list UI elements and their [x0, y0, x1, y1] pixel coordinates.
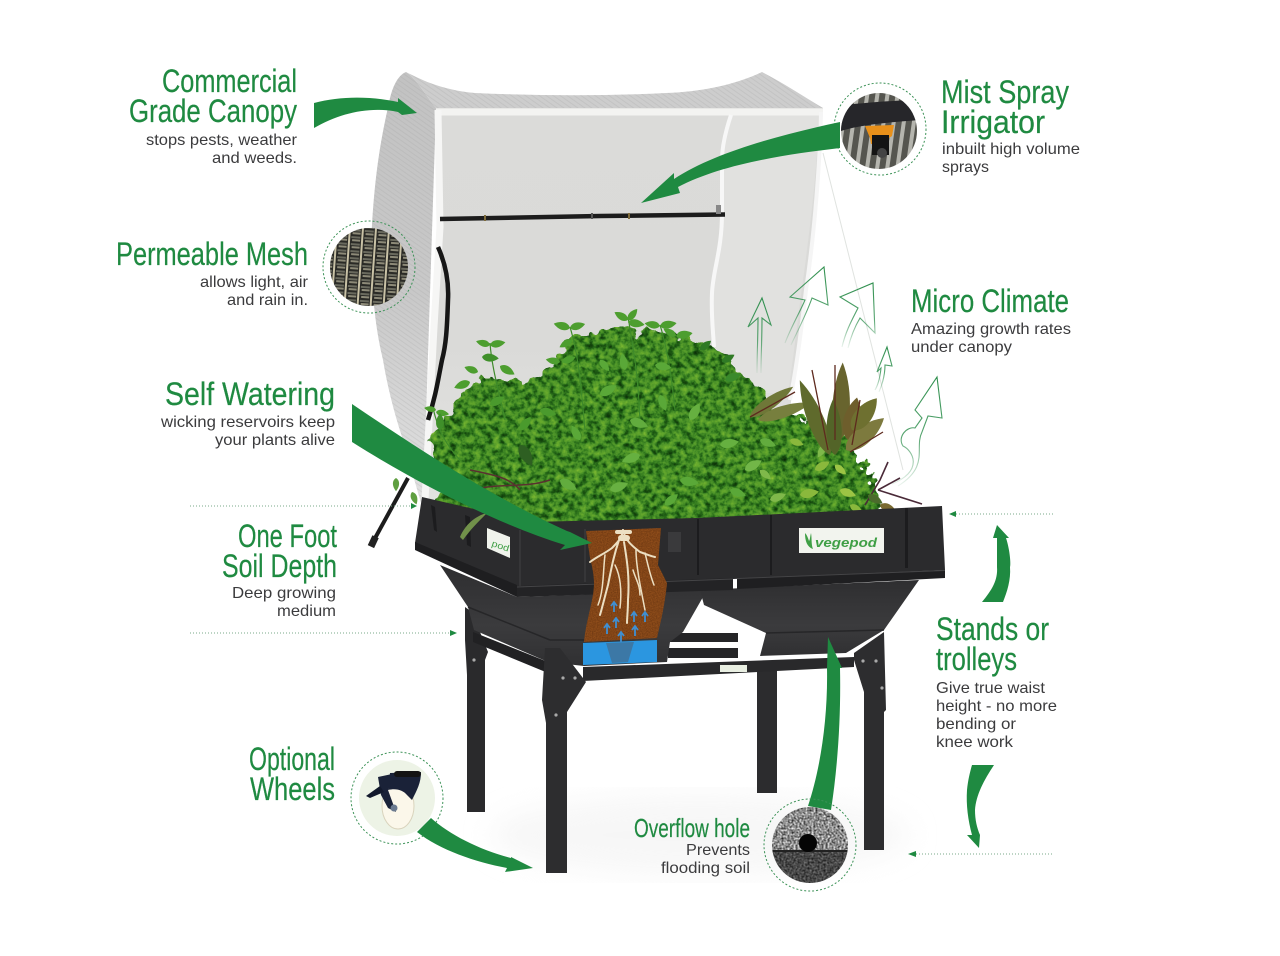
- heading: Micro Climate: Amazing growth rates: [911, 321, 1071, 338]
- heading: Commercial Grade Canopy: [129, 63, 298, 167]
- back left leg: [465, 607, 488, 812]
- heading: Stands or trolleys: bending or: [936, 716, 1017, 733]
- arrow: wheels: [417, 818, 533, 872]
- heading: Mist Spray Irrigator: sprays: [942, 159, 989, 176]
- heading: Stands or trolleys: trolleys: [936, 641, 1017, 677]
- arrow: self watering: [352, 404, 592, 550]
- planter: [415, 497, 945, 673]
- heading: Self Watering: Self Watering: [165, 376, 335, 412]
- bright mid leaves: [488, 353, 777, 508]
- heading: Optional Wheels: [249, 741, 335, 807]
- canopy top panel: [406, 72, 823, 108]
- roots: [590, 530, 655, 623]
- arrow: stands down: [967, 765, 994, 848]
- front vegepod label: [799, 528, 884, 553]
- heading: Overflow hole: Overflow hole: [634, 813, 750, 843]
- stems: [433, 317, 675, 460]
- leafy sprigs: [393, 307, 742, 505]
- heading: Self Watering: [160, 376, 335, 449]
- planter upper body: [415, 497, 945, 588]
- heading: Stands or trolleys: [936, 611, 1057, 751]
- infographic canvas: [118, 68, 1080, 892]
- heading: Optional Wheels: Wheels: [250, 771, 335, 807]
- heading: Permeable Mesh: [116, 236, 309, 309]
- horizontal black mist tube: [440, 205, 725, 221]
- heading: Stands or trolleys: Stands or: [936, 611, 1049, 647]
- canopy side panel: [371, 72, 436, 510]
- heading: Overflow hole: [634, 813, 750, 877]
- heading: One Foot Soil Depth: One Foot: [238, 518, 337, 554]
- white frame: [436, 108, 823, 116]
- heading: One Foot Soil Depth: medium: [277, 603, 336, 620]
- arrow: canopy: [314, 98, 417, 128]
- water: [583, 640, 657, 665]
- yellow green lower leaves: [758, 437, 864, 515]
- heading: One Foot Soil Depth: Soil Depth: [222, 548, 337, 584]
- canopy interior: [423, 108, 823, 500]
- heading: Mist Spray Irrigator: Mist Spray: [941, 74, 1069, 110]
- body panel relief: [431, 505, 908, 575]
- updraft arrow 2: [785, 267, 828, 345]
- wicking arrows: [604, 602, 648, 642]
- canopy: [368, 72, 823, 548]
- icon: overflow hole close-up: [764, 799, 856, 891]
- heading: Permeable Mesh: and rain in.: [227, 292, 308, 309]
- front left leg and gusset: [542, 648, 586, 873]
- heading: Commercial Grade Canopy: stops pests, weather: [146, 132, 298, 149]
- arrow: mist irrigator: [641, 122, 840, 203]
- front rim right: [737, 570, 945, 589]
- tray step line: [468, 607, 884, 640]
- plants: [393, 307, 922, 545]
- black hose: [428, 247, 448, 420]
- dark reddish understory: [448, 442, 550, 496]
- heading: One Foot Soil Depth: Deep growing: [232, 585, 336, 602]
- floor shadow: [490, 795, 910, 875]
- inner cross bars: [668, 633, 738, 658]
- heading: Mist Spray Irrigator: inbuilt high volume: [942, 141, 1080, 158]
- dotted lead lines: [190, 503, 1054, 857]
- soil: [584, 528, 667, 642]
- red veined sorrel leaves: [747, 362, 890, 458]
- heading: Micro Climate: under canopy: [911, 339, 1012, 356]
- icon: caster wheel: [351, 752, 443, 844]
- heading: Mist Spray Irrigator: [941, 74, 1080, 176]
- dark plant at right corner: [865, 462, 922, 514]
- inner white pipe: [712, 115, 731, 347]
- heading: Self Watering: your plants alive: [215, 432, 335, 449]
- heading: Stands or trolleys: Give true waist: [936, 680, 1046, 697]
- left tray: [440, 565, 707, 666]
- side vegepod label: [487, 528, 511, 558]
- right tray: [700, 580, 919, 656]
- icon: mesh close-up: [323, 221, 415, 313]
- heading: Mist Spray Irrigator: Irrigator: [941, 104, 1045, 140]
- front vegepod label: vegepod: [815, 535, 878, 550]
- front stand frame: [472, 632, 886, 873]
- heading: Stands or trolleys: knee work: [936, 734, 1014, 751]
- canopy right strip: [712, 115, 819, 393]
- updraft arrow 1: [748, 298, 771, 373]
- updraft arrow 5: [892, 377, 942, 486]
- heading: Optional Wheels: Optional: [249, 741, 335, 777]
- front rim left: [517, 578, 733, 597]
- arrow: overflow hole: [808, 637, 842, 810]
- left rim: [415, 542, 517, 597]
- heading: Self Watering: wicking reservoirs keep: [160, 414, 335, 431]
- heading: One Foot Soil Depth: [222, 518, 337, 620]
- stand: [465, 607, 854, 812]
- thin guy line: [823, 153, 903, 470]
- back right leg: [757, 668, 777, 793]
- heading: Commercial Grade Canopy: Grade Canopy: [129, 93, 297, 129]
- heading: Micro Climate: [911, 283, 1071, 356]
- front right leg and gusset: [854, 632, 886, 850]
- heading: Overflow hole: Prevents: [686, 842, 750, 859]
- hose end: [374, 478, 408, 540]
- stand label: [720, 665, 747, 672]
- updraft arrow 3: [840, 283, 875, 348]
- heading: Stands or trolleys: height - no more: [936, 698, 1057, 715]
- side bar: [473, 632, 548, 673]
- foliage mass: [433, 326, 885, 545]
- side vegepod label: pod: [490, 538, 511, 553]
- bolts: [472, 658, 884, 717]
- heading: Overflow hole: flooding soil: [661, 860, 750, 877]
- soil cutaway: [583, 528, 667, 665]
- front cross bar: [583, 657, 854, 681]
- micro climate outline arrows: [748, 267, 942, 486]
- heading: Permeable Mesh: allows light, air: [200, 274, 309, 291]
- icon: spray nozzle close-up: [834, 83, 926, 175]
- heading: Micro Climate: Micro Climate: [911, 283, 1069, 319]
- heading: Permeable Mesh: Permeable Mesh: [116, 236, 308, 272]
- heading: Commercial Grade Canopy: and weeds.: [212, 150, 297, 167]
- heading: Commercial Grade Canopy: Commercial: [162, 63, 297, 99]
- arrow: stands up: [982, 525, 1010, 602]
- leaf over planter: [460, 513, 487, 540]
- updraft arrow 4: [875, 347, 892, 392]
